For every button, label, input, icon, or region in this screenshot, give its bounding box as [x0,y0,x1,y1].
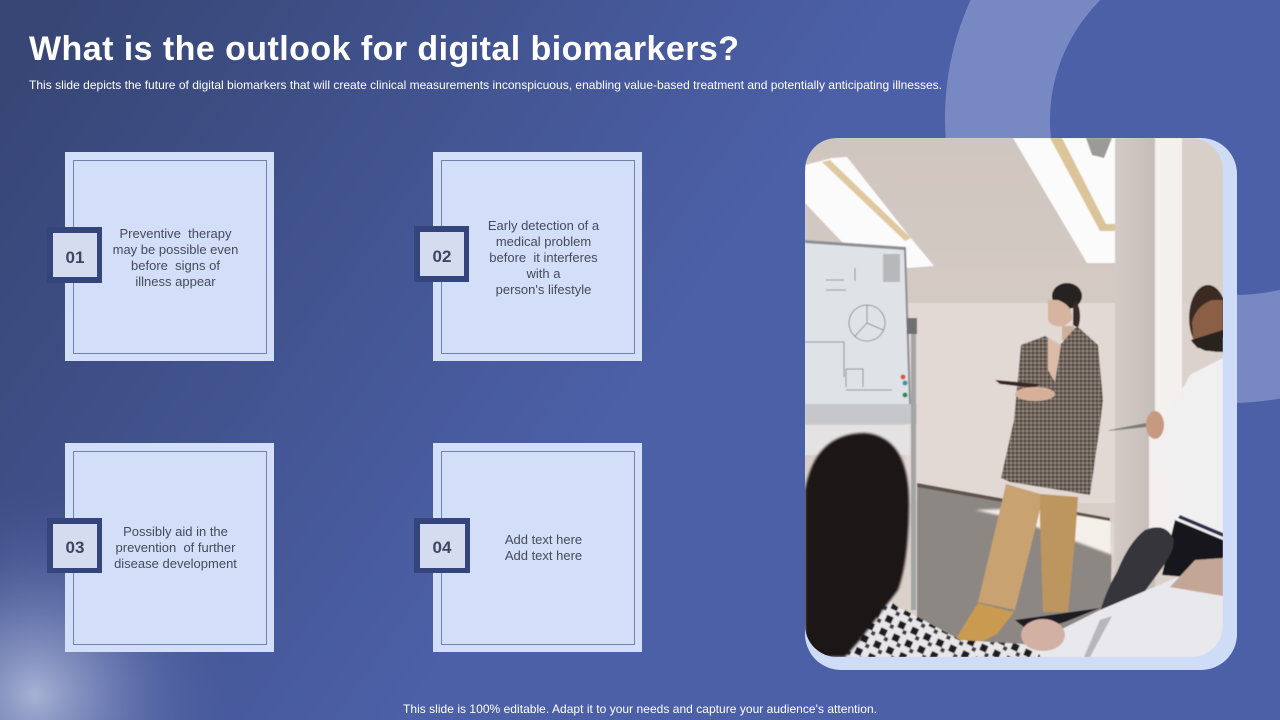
number badge 03: 03 [66,538,84,557]
title: What is the outlook for digital biomarkers? [29,30,739,68]
chair [1100,526,1174,610]
card 03 text: Possibly aid in the [123,524,228,539]
photo: meeting at whiteboard [805,138,1227,657]
seated woman [805,433,1065,657]
presenter [952,283,1103,650]
right skylight [1013,138,1115,263]
card 01 text: Preventive therapy [119,226,232,241]
card 02 text: medical problem [496,234,591,249]
number badge 01: 01 [66,248,84,267]
card 02 text: Early detection of a [488,218,600,233]
card 01 text: before signs of [131,258,220,273]
card 04 text: Add text here [505,548,582,563]
panel: card 01 [47,152,274,361]
card 02 text: with a [526,266,561,281]
whiteboard [805,240,917,610]
card 04 text [505,532,582,563]
panel: card 03 [47,443,274,652]
number badge 04 [414,518,470,573]
footer note: This slide is 100% editable. Adapt it to your needs and capture your audience's attention. [403,702,877,716]
number badge 02: 02 [433,247,451,266]
panel: card 04 [414,443,642,652]
pillar [1115,138,1223,598]
number badge 03 [47,518,102,573]
table [1015,558,1223,657]
number badge 02 [414,226,469,282]
card 02 text: before it interferes [489,250,598,265]
card 02 text: person's lifestyle [496,282,591,297]
decorative ring [945,0,1280,403]
photo frame [805,138,1237,670]
left skylight [805,157,934,268]
card 02 text [488,218,600,297]
card 01 text: may be possible even [113,242,238,257]
card 03 text: prevention of further [116,540,236,555]
number badge 01 [47,227,102,283]
card 03 text [114,524,237,571]
card 01 text: illness appear [135,274,216,289]
subtitle: This slide depicts the future of digital biomarkers that will create clinical measurements inconspicuous, enabling value-based treatment and potentially anticipating illnesses. [29,78,942,92]
card 01 text [113,226,238,289]
number badge 04: 04 [433,538,452,557]
card 04 text: Add text here [505,532,582,547]
panel: card 02 [414,152,642,361]
man on right [1108,285,1227,580]
whiteboard sketches [805,268,892,390]
card 03 text: disease development [114,556,237,571]
floor [917,483,1112,657]
